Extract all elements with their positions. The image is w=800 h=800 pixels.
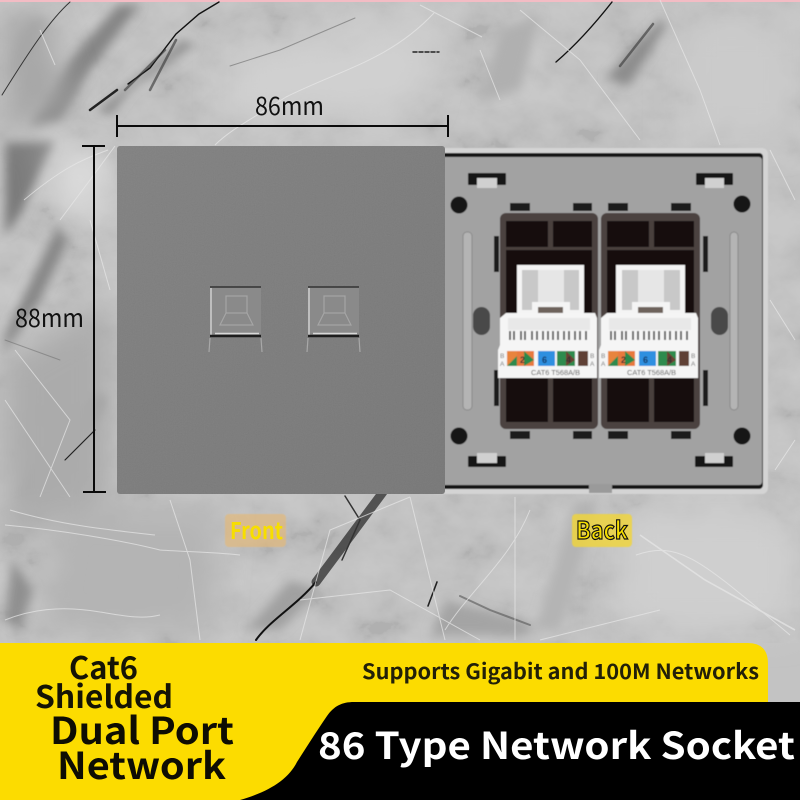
dimension: 86mm width (117, 87, 448, 137)
wire colour codes: 4 (566, 355, 571, 365)
clips (468, 173, 733, 467)
panel: back of socket (430, 148, 768, 494)
wire colour codes: A (590, 361, 595, 368)
panel: front plate (117, 146, 445, 494)
dimension: 88mm height (15, 146, 106, 492)
dark marble veins (2, 2, 653, 640)
wire colour codes: 6 (542, 355, 547, 365)
headline: Dual Port: Dual Port (50, 701, 234, 755)
headline: Network: Network (57, 736, 227, 790)
wire colour codes: A (601, 361, 606, 368)
mounting holes (450, 196, 750, 444)
wire colour codes: A (691, 361, 696, 368)
wire colour codes: 2 (621, 355, 626, 365)
wire colour codes: 4 (667, 355, 672, 365)
side slots (463, 232, 738, 410)
module right (599, 213, 700, 429)
white top of keystone (517, 265, 584, 315)
wire colour codes: A (500, 361, 505, 368)
wire colour codes: B (691, 353, 695, 360)
small tabs (494, 203, 708, 439)
port left (209, 287, 262, 352)
frame (430, 148, 768, 494)
headline: Cat6: Cat6 (69, 643, 138, 688)
module left: CAT6 T568A/B (531, 370, 580, 377)
yellow banner (0, 643, 800, 800)
black banner (240, 702, 800, 800)
module left (498, 213, 598, 429)
wire colour codes (601, 351, 696, 368)
wire colour codes: 2 (520, 355, 525, 365)
dimension: 86mm width: 86mm (255, 87, 324, 123)
wire colour codes (500, 351, 595, 368)
title: 86 Type Network Socket (318, 716, 795, 770)
white terminal block (599, 313, 698, 378)
label: Back: Back (576, 511, 628, 546)
module right: CAT6 T568A/B (627, 370, 676, 377)
wire colour codes: B (590, 353, 594, 360)
wire colour codes: 6 (643, 355, 648, 365)
tagline: Supports Gigabit and 100M Networks (362, 656, 759, 686)
dimension: 88mm height: 88mm (15, 299, 84, 335)
white top of keystone (616, 265, 685, 315)
headline: Shielded: Shielded (35, 672, 173, 717)
pink top edge (0, 0, 800, 2)
label: Front: Front (230, 512, 283, 546)
white terminal block (498, 313, 597, 378)
marble light veins (5, 0, 795, 640)
port right (307, 287, 360, 352)
wire colour codes: B (601, 353, 605, 360)
wire colour codes: B (500, 353, 504, 360)
